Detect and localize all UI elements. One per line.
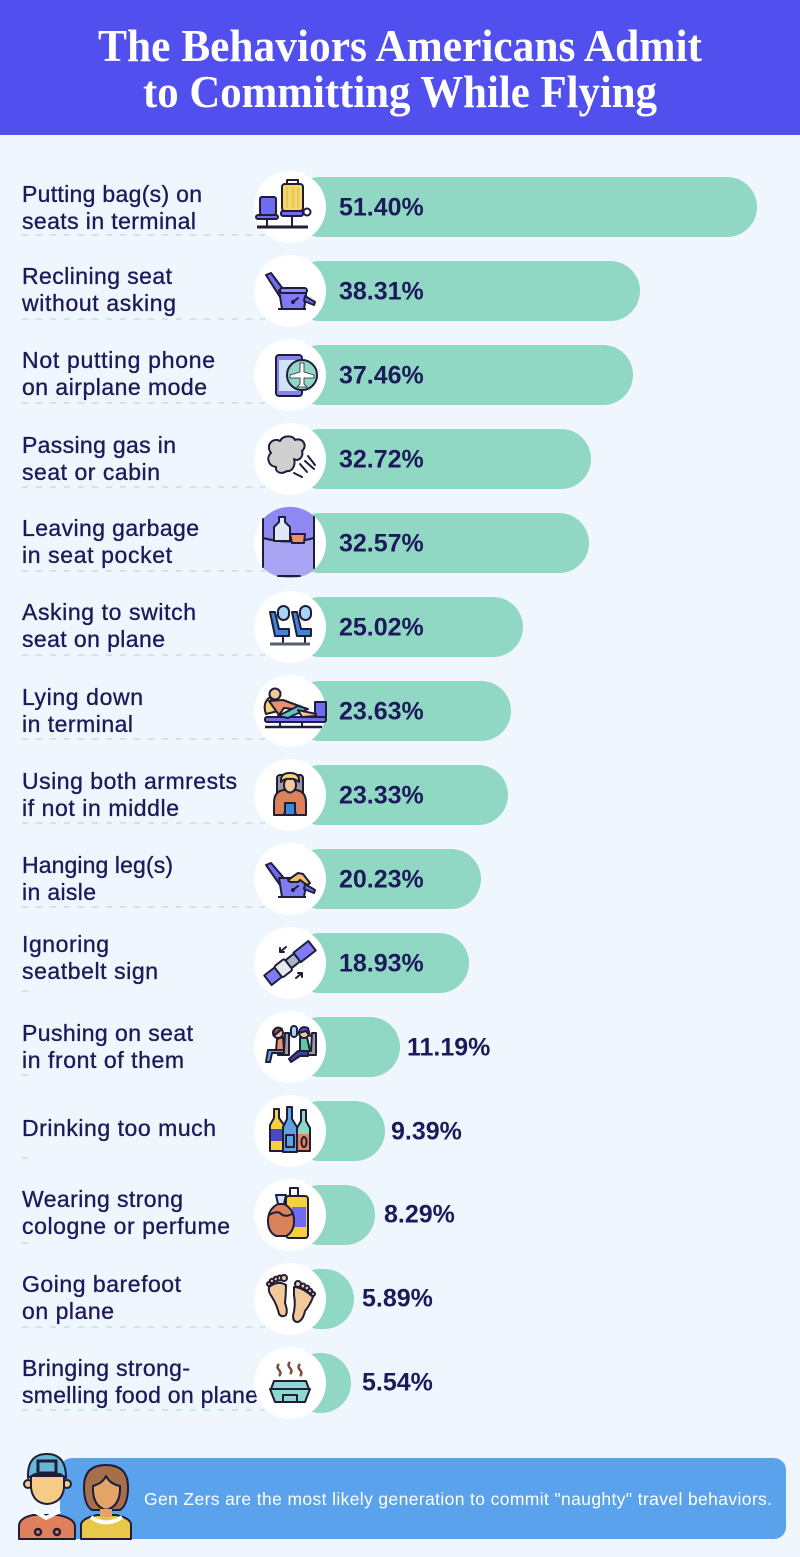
- row: hanging legs in aisle: Hanging leg(s): [22, 852, 173, 878]
- row: hanging legs in aisle: in aisle: [22, 879, 96, 905]
- row: phone not in airplane mode: [22, 339, 633, 411]
- row: strong-smelling food: smelling food on plane: [22, 1382, 258, 1408]
- row: strong cologne: 8.29%: [384, 1200, 455, 1228]
- row: drinking too much: [22, 1095, 462, 1167]
- row: ignoring seatbelt sign: [22, 927, 469, 999]
- row: strong cologne: Wearing strong: [22, 1186, 183, 1212]
- row: going barefoot: on plane: [22, 1298, 114, 1324]
- row: using both armrests: if not in middle: [22, 795, 179, 821]
- row: going barefoot: 5.89%: [362, 1284, 433, 1312]
- row: reclining seat: [21, 255, 640, 327]
- row: leaving garbage: Leaving garbage: [22, 515, 199, 541]
- row: pushing on seat: Pushing on seat: [22, 1020, 194, 1046]
- row: leaving garbage: in seat pocket: [22, 542, 173, 568]
- row: ignoring seatbelt sign: Ignoring: [22, 931, 109, 957]
- row: putting bags on seats: 51.40%: [339, 194, 424, 222]
- row: pushing on seat: in front of them: [22, 1047, 184, 1073]
- icon: Gen Z girl: [81, 1465, 131, 1539]
- row: drinking too much: Drinking too much: [22, 1115, 216, 1141]
- row: lying down in terminal: [22, 675, 511, 747]
- row: reclining seat: 38.31%: [339, 278, 424, 306]
- row: strong cologne: cologne or perfume: [22, 1213, 230, 1239]
- row: putting bags on seats: seats in terminal: [22, 208, 196, 234]
- row: putting bags on seats: Putting bag(s) on: [22, 181, 202, 207]
- header banner with title: to Committing While Flying: [143, 66, 657, 117]
- row: pushing on seat: 11.19%: [407, 1034, 490, 1062]
- row: phone not in airplane mode: Not putting phone: [22, 347, 215, 373]
- row: drinking too much: 9.39%: [391, 1118, 462, 1146]
- header banner with title: The Behaviors Americans Admit: [98, 20, 703, 71]
- row: strong-smelling food: Bringing strong-: [22, 1355, 190, 1381]
- row: passing gas: Passing gas in: [22, 432, 176, 458]
- row: passing gas: 32.72%: [339, 446, 424, 474]
- callout: Gen Z note: Gen Zers are the most likely generation to commit "naughty" travel behaviors.: [144, 1489, 772, 1509]
- row: passing gas: [22, 423, 591, 495]
- row: reclining seat: Reclining seat: [22, 263, 173, 289]
- row: asking to switch seat: [22, 591, 523, 663]
- row: pushing on seat: [22, 1011, 490, 1083]
- row: hanging legs in aisle: 20.23%: [339, 866, 424, 894]
- row: going barefoot: Going barefoot: [22, 1271, 182, 1297]
- row: phone not in airplane mode: 37.46%: [339, 362, 424, 390]
- callout: Gen Z note: [19, 1454, 786, 1539]
- row: asking to switch seat: 25.02%: [339, 614, 424, 642]
- row: reclining seat: without asking: [21, 290, 176, 316]
- row: putting bags on seats: [22, 171, 757, 243]
- row: asking to switch seat: Asking to switch: [22, 599, 196, 625]
- row: ignoring seatbelt sign: seatbelt sign: [22, 958, 158, 984]
- row: passing gas: seat or cabin: [22, 459, 160, 485]
- row: strong-smelling food: [22, 1347, 433, 1419]
- row: using both armrests: Using both armrests: [22, 768, 237, 794]
- row: strong-smelling food: 5.54%: [362, 1368, 433, 1396]
- row: hanging legs in aisle: [22, 843, 481, 915]
- row: using both armrests: [22, 759, 508, 831]
- row: going barefoot: [22, 1263, 433, 1335]
- row: lying down in terminal: 23.63%: [339, 698, 424, 726]
- row: leaving garbage: [22, 507, 589, 579]
- row: phone not in airplane mode: on airplane mode: [22, 374, 207, 400]
- row: leaving garbage: 32.57%: [339, 530, 424, 558]
- row: lying down in terminal: Lying down: [22, 684, 143, 710]
- header banner with title: [0, 0, 800, 135]
- row: using both armrests: 23.33%: [339, 782, 424, 810]
- row: ignoring seatbelt sign: 18.93%: [339, 950, 424, 978]
- icon: Gen Z boy: [19, 1454, 75, 1539]
- row: asking to switch seat: seat on plane: [22, 626, 165, 652]
- row: strong cologne: [22, 1179, 455, 1251]
- row: lying down in terminal: in terminal: [22, 711, 133, 737]
